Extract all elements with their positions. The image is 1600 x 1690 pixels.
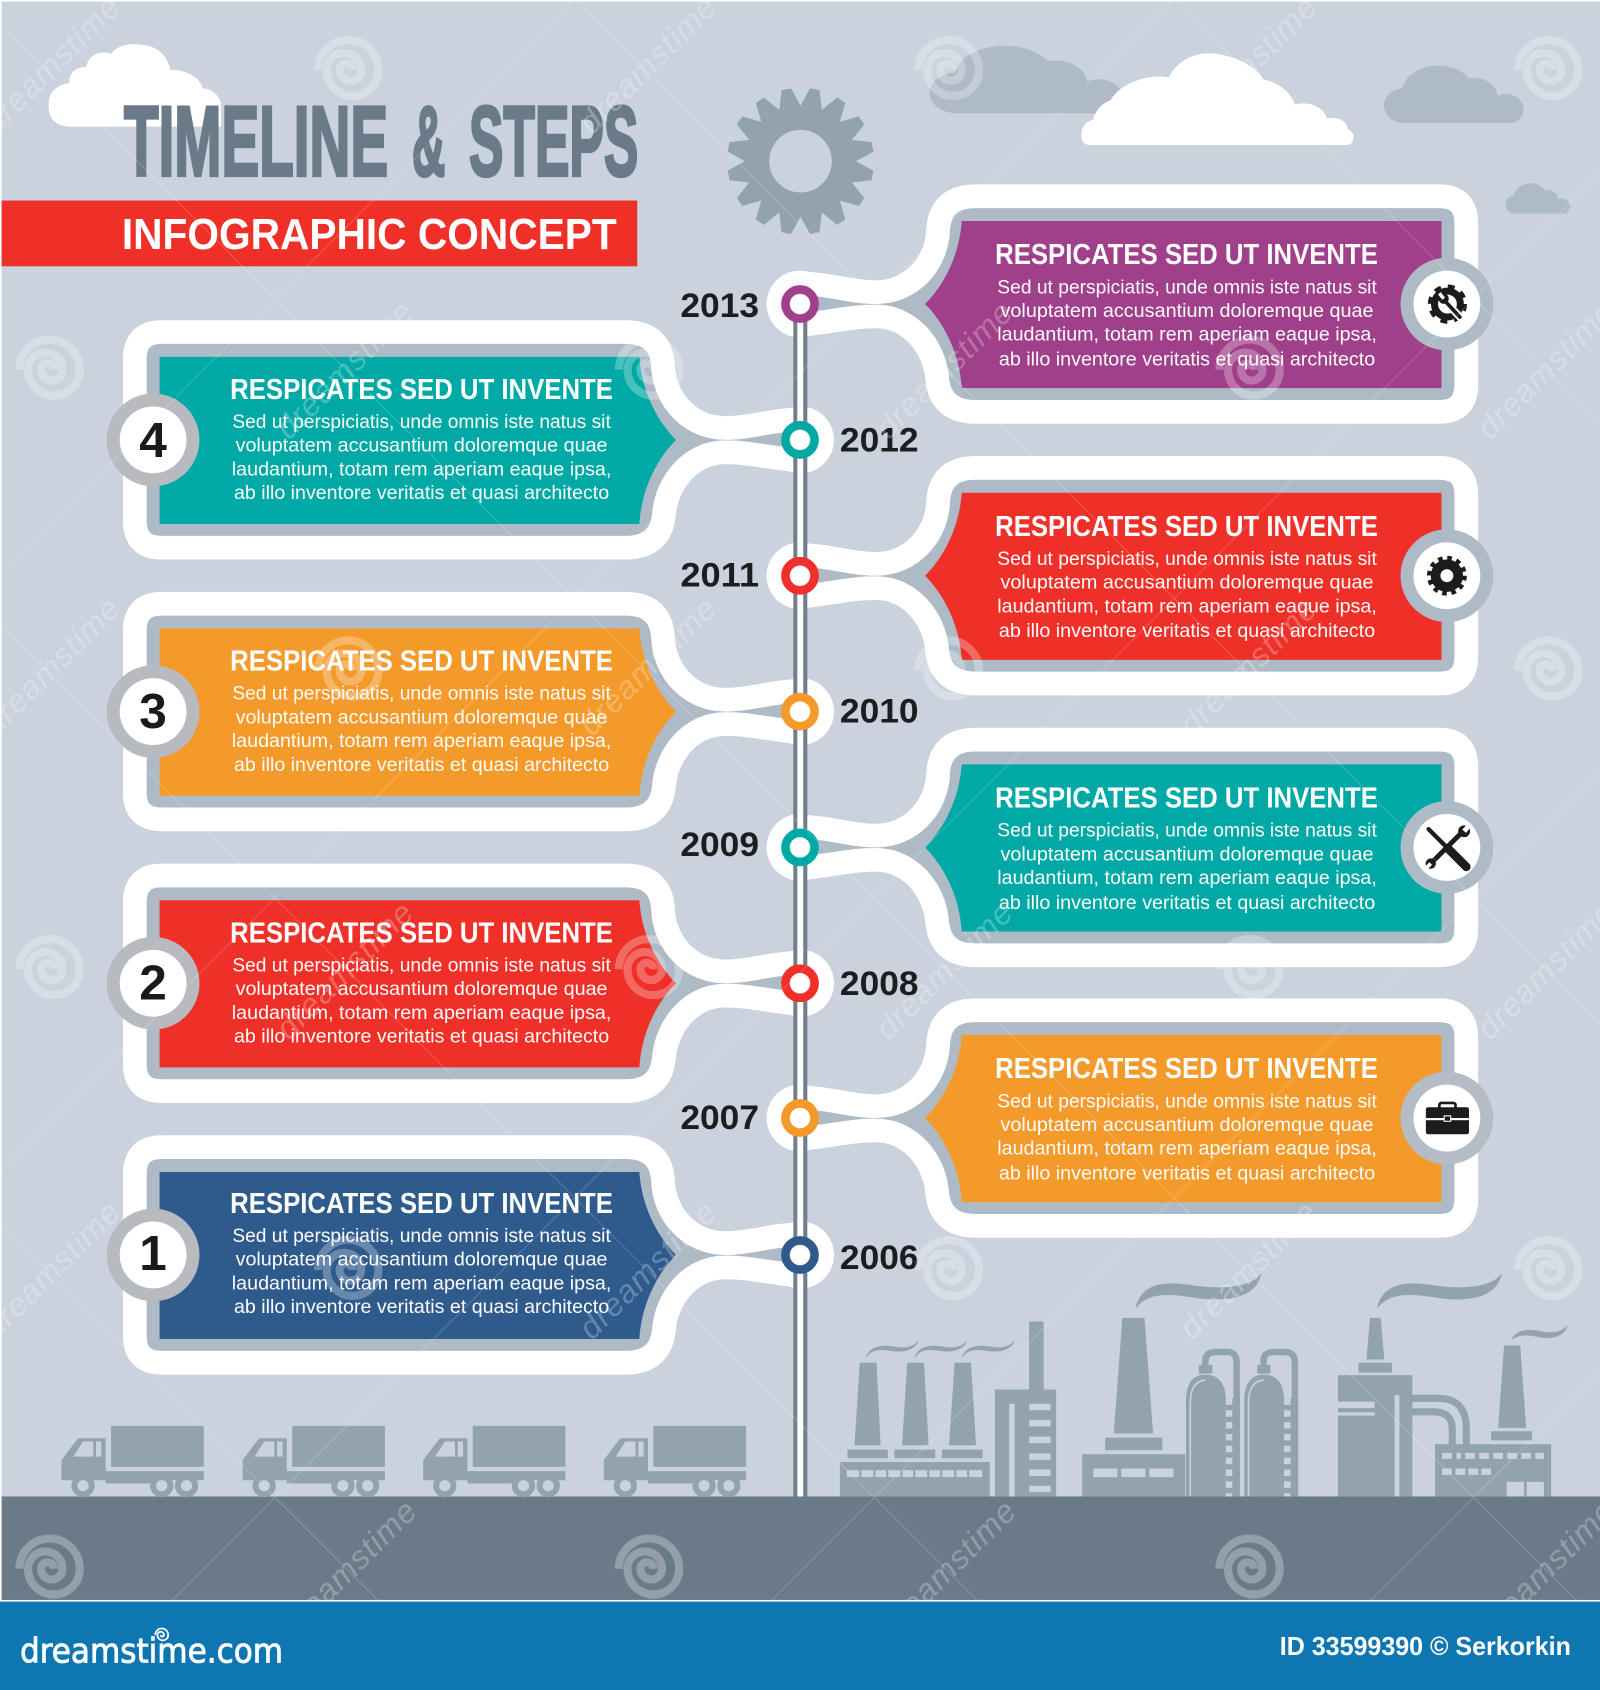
- body text: ab illo inventore veritatis et quasi architecto: [999, 1162, 1375, 1184]
- body text: Sed ut perspiciatis, unde omnis iste natus sit: [997, 820, 1377, 842]
- number badge: [107, 665, 199, 758]
- body text: ab illo inventore veritatis et quasi architecto: [234, 1296, 609, 1318]
- cloud: grey right: [1384, 66, 1524, 123]
- node: 2010: [785, 692, 919, 730]
- node: 2006: 2006: [840, 1239, 919, 1277]
- node: 2009: 2009: [680, 826, 759, 864]
- panel: red 2011: [767, 468, 1493, 684]
- body text: laudantium, totam rem aperiam eaque ipsa,: [997, 1138, 1377, 1160]
- body text: [997, 276, 1377, 370]
- icon: large gear: [726, 87, 875, 235]
- cloud: white top left: [49, 44, 221, 127]
- panel: 1: [107, 1147, 834, 1363]
- body text: Sed ut perspiciatis, unde omnis iste natus sit: [232, 954, 611, 976]
- title: STEPS: [469, 87, 638, 198]
- body text: voluptatem accusantium doloremque quae: [1001, 572, 1374, 594]
- body text: laudantium, totam rem aperiam eaque ipsa,: [232, 730, 611, 752]
- body text: [997, 1090, 1377, 1184]
- panel: orange 2007: [767, 1010, 1493, 1226]
- title: TIMELINE: [124, 87, 388, 198]
- body text: Sed ut perspiciatis, unde omnis iste natus sit: [232, 1225, 611, 1247]
- node: 2012: 2012: [840, 422, 919, 460]
- body text: voluptatem accusantium doloremque quae: [236, 978, 608, 1000]
- node: 2013: [680, 287, 815, 325]
- banner: infographic concept: INFOGRAPHIC CONCEPT: [122, 211, 617, 259]
- body text: Sed ut perspiciatis, unde omnis iste natus sit: [997, 1090, 1377, 1112]
- cloud: grey top centre: [930, 46, 1123, 113]
- icon: gear: [1401, 529, 1493, 622]
- body text: voluptatem accusantium doloremque quae: [236, 435, 608, 457]
- icon: gear with wrench: [1401, 258, 1493, 350]
- number badge: 1: [139, 1225, 167, 1281]
- body text: laudantium, totam rem aperiam eaque ipsa,: [232, 458, 611, 480]
- panel: 2: [107, 875, 834, 1091]
- banner: infographic concept: [2, 201, 637, 266]
- panel: teal 2009: [767, 740, 1493, 955]
- cloud: white top right: [1081, 53, 1354, 145]
- watermark text: dreamstime: [269, 894, 421, 1046]
- panel: 3: [107, 604, 834, 819]
- body text: laudantium, totam rem aperiam eaque ipsa,: [997, 324, 1377, 346]
- body text: voluptatem accusantium doloremque quae: [236, 1249, 608, 1271]
- node: 2011: 2011: [680, 557, 759, 595]
- node: 2007: 2007: [680, 1099, 759, 1137]
- body text: ab illo inventore veritatis et quasi architecto: [999, 892, 1375, 914]
- heading: RESPICATES SED UT INVENTE: [230, 374, 613, 406]
- heading: RESPICATES SED UT INVENTE: [995, 1053, 1378, 1085]
- heading: RESPICATES SED UT INVENTE: [230, 1188, 613, 1220]
- body text: [232, 1225, 611, 1318]
- body text: ab illo inventore veritatis et quasi architecto: [234, 754, 609, 776]
- trucks: [61, 1426, 746, 1497]
- footer bar: [0, 1600, 1600, 1690]
- body text: laudantium, totam rem aperiam eaque ipsa,: [997, 595, 1377, 617]
- body text: laudantium, totam rem aperiam eaque ipsa,: [997, 867, 1377, 889]
- node: 2011: [680, 557, 815, 595]
- number badge: 2: [139, 954, 167, 1010]
- panel: purple 2013: [767, 196, 1493, 412]
- number badge: [107, 1209, 199, 1301]
- footer logo: dreamstime.com: [20, 1632, 283, 1671]
- number badge: 4: [139, 412, 167, 468]
- body text: Sed ut perspiciatis, unde omnis iste natus sit: [232, 411, 611, 433]
- body text: ab illo inventore veritatis et quasi architecto: [999, 620, 1375, 642]
- watermark text: dreamstime: [572, 590, 724, 742]
- watermark text: dreamstime: [272, 1492, 424, 1645]
- node: 2009: [680, 826, 815, 864]
- body text: Sed ut perspiciatis, unde omnis iste natus sit: [997, 276, 1377, 298]
- body text: voluptatem accusantium doloremque quae: [1001, 300, 1374, 322]
- body text: laudantium, totam rem aperiam eaque ipsa,: [232, 1002, 611, 1024]
- title: &: [412, 87, 445, 198]
- node: 2012: [785, 422, 919, 460]
- watermark text: dreamstime: [269, 293, 421, 446]
- footer credit: ID 33599390 © Serkorkin: [1280, 1633, 1571, 1661]
- heading: RESPICATES SED UT INVENTE: [995, 511, 1378, 543]
- number badge: 3: [139, 683, 167, 739]
- node: 2013: 2013: [680, 287, 759, 325]
- ground strip: [2, 1496, 1600, 1600]
- node: 2007: [680, 1099, 815, 1137]
- heading: RESPICATES SED UT INVENTE: [230, 917, 613, 949]
- icon: briefcase: [1401, 1072, 1493, 1164]
- body text: [232, 411, 611, 504]
- body text: [997, 820, 1377, 914]
- number badge: [107, 937, 199, 1030]
- body text: [232, 683, 611, 776]
- factory: three chimneys and tower: [840, 1321, 1056, 1496]
- node: 2010: 2010: [840, 692, 919, 730]
- watermark text: dreamstime: [868, 293, 1020, 446]
- body text: voluptatem accusantium doloremque quae: [1001, 1114, 1374, 1136]
- cloud: small grey right: [1506, 183, 1570, 213]
- timeline spine: [793, 304, 807, 1496]
- panel: 4: [107, 332, 834, 548]
- factory: chimney and tanks: [1082, 1273, 1298, 1496]
- body text: [232, 954, 611, 1048]
- watermark text: dreamstime: [1172, 1194, 1325, 1346]
- watermark text: dreamstime: [1172, 590, 1325, 742]
- node: 2006: [785, 1239, 919, 1277]
- body text: [997, 548, 1377, 642]
- number badge: [107, 394, 199, 486]
- body text: Sed ut perspiciatis, unde omnis iste natus sit: [232, 683, 611, 705]
- heading: RESPICATES SED UT INVENTE: [230, 646, 613, 678]
- watermark text: dreamstime: [868, 894, 1020, 1046]
- body text: ab illo inventore veritatis et quasi architecto: [234, 1026, 609, 1048]
- watermark text: dreamstime: [871, 1492, 1024, 1645]
- heading: RESPICATES SED UT INVENTE: [995, 239, 1378, 271]
- body text: ab illo inventore veritatis et quasi architecto: [999, 348, 1375, 370]
- heading: RESPICATES SED UT INVENTE: [995, 783, 1378, 815]
- node: 2008: 2008: [840, 965, 919, 1003]
- body text: voluptatem accusantium doloremque quae: [1001, 843, 1374, 865]
- body text: ab illo inventore veritatis et quasi architecto: [234, 482, 609, 504]
- factory: right complex: [1338, 1273, 1568, 1496]
- body text: Sed ut perspiciatis, unde omnis iste natus sit: [997, 548, 1377, 570]
- icon: crossed tools: [1401, 801, 1493, 894]
- watermark text: dreamstime: [572, 1194, 724, 1346]
- node: 2008: [785, 965, 919, 1003]
- body text: voluptatem accusantium doloremque quae: [236, 706, 608, 728]
- body text: laudantium, totam rem aperiam eaque ipsa,: [232, 1272, 611, 1294]
